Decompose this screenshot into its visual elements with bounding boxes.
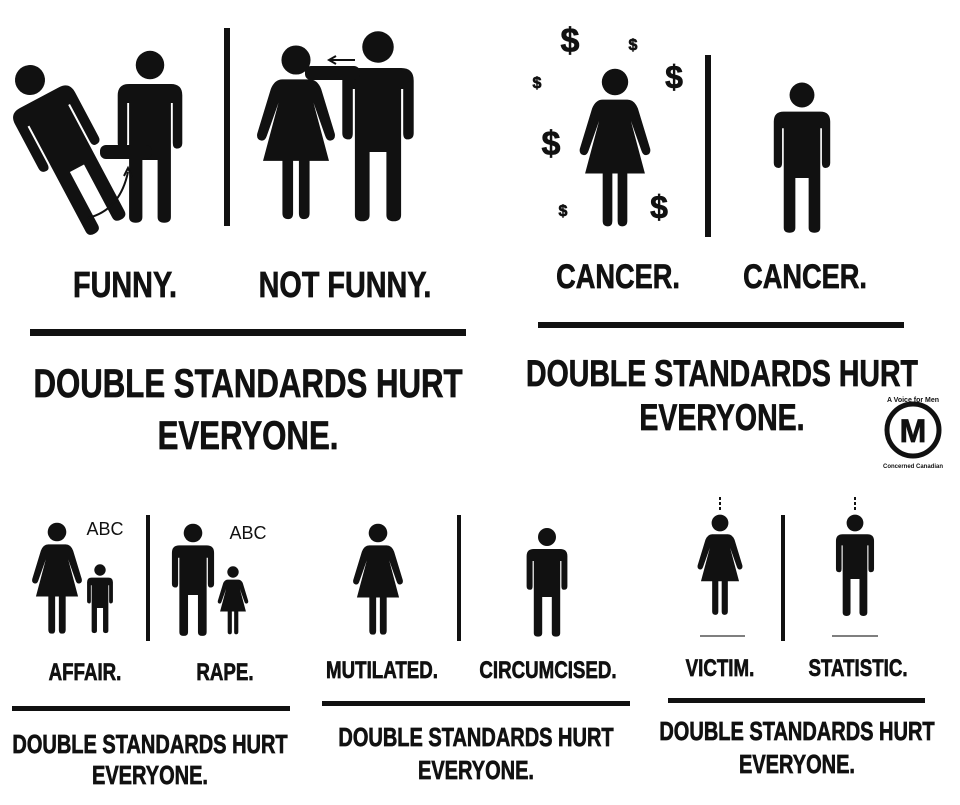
icon: standing man kicking xyxy=(88,51,182,223)
heading: DOUBLE STANDARDS HURT xyxy=(338,722,614,752)
icons: woman and boy xyxy=(32,523,113,634)
logo xyxy=(883,397,943,470)
panel: mutilated / circumcised xyxy=(322,515,630,785)
heading: EVERYONE. xyxy=(418,755,534,785)
panel: victim / statistic: STATISTIC. xyxy=(808,655,908,682)
heading: EVERYONE. xyxy=(639,396,805,438)
icon: man punching xyxy=(305,31,414,221)
heading: DOUBLE STANDARDS HURT xyxy=(659,716,935,746)
label: funny: FUNNY. xyxy=(73,264,177,305)
panel: cancer: CANCER. xyxy=(743,257,867,296)
icon: dollar signs: $ xyxy=(559,203,568,220)
panel: funny / not funny xyxy=(0,28,466,458)
icon: falling man kicked xyxy=(0,51,138,243)
heading: DOUBLE STANDARDS HURT xyxy=(12,729,288,759)
heading: EVERYONE. xyxy=(92,760,208,790)
panel: cancer xyxy=(526,22,943,470)
logo: M xyxy=(900,413,926,449)
panel: victim / statistic xyxy=(659,497,935,779)
panel: victim / statistic: VICTIM. xyxy=(686,655,754,682)
heading: DOUBLE STANDARDS HURT xyxy=(33,361,463,406)
icon: dollar signs: $ xyxy=(542,125,561,163)
panel: affair / rape: RAPE. xyxy=(196,659,254,686)
logo: Concerned Canadian xyxy=(883,464,943,470)
labels: CANCER. xyxy=(556,257,680,296)
panel: mutilated / circumcised: CIRCUMCISED. xyxy=(479,657,617,684)
logo: A Voice for Men xyxy=(887,397,939,404)
icon: man xyxy=(774,83,830,233)
icon: dollar signs: $ xyxy=(561,22,580,60)
panel: affair / rape: ABC xyxy=(229,523,267,543)
icon: dollar signs: $ xyxy=(629,37,638,54)
label: not funny: NOT FUNNY. xyxy=(259,264,431,305)
icon: dollar signs: $ xyxy=(665,59,683,95)
icon: dollar signs: $ xyxy=(533,75,542,92)
panel: affair / rape xyxy=(12,515,290,790)
icon: woman xyxy=(257,45,335,219)
heading: EVERYONE. xyxy=(158,413,338,458)
icon: woman xyxy=(580,69,650,226)
icon: dollar signs xyxy=(533,22,683,225)
icon: dollar signs: $ xyxy=(650,189,668,225)
heading: DOUBLE STANDARDS HURT xyxy=(526,352,918,394)
panel: affair / rape: ABC xyxy=(86,519,124,539)
icons: man and girl xyxy=(172,524,248,636)
panel: affair / rape: AFFAIR. xyxy=(49,659,121,686)
panel: mutilated / circumcised: MUTILATED. xyxy=(326,657,438,684)
heading: EVERYONE. xyxy=(739,749,855,779)
